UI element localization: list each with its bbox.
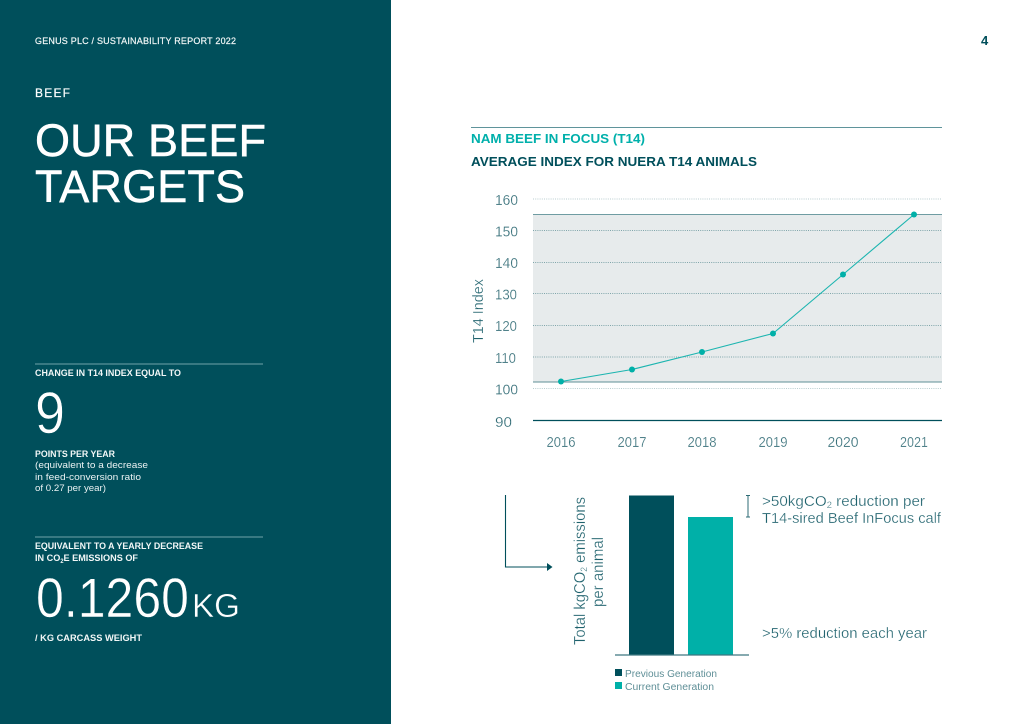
stat: T14 index change: (equivalent to a decrease bbox=[35, 460, 148, 471]
annotation: per calf reduction: T14-sired Beef InFocus calf bbox=[762, 511, 942, 527]
stat: T14 index change: CHANGE IN T14 INDEX EQUAL TO bbox=[35, 368, 181, 379]
y axis labels: 130 bbox=[495, 286, 517, 304]
reduction bracket bbox=[746, 496, 750, 517]
legend: Previous Generation bbox=[625, 669, 717, 680]
bar: previous generation bbox=[629, 496, 674, 656]
annotation: per calf reduction: 2 bbox=[827, 500, 832, 510]
line chart: T14 index bbox=[470, 192, 942, 451]
annotation: per calf reduction: reduction per bbox=[832, 494, 925, 510]
annotation: per calf reduction: >50kgCO bbox=[762, 494, 824, 510]
x axis labels: 2021 bbox=[900, 434, 928, 451]
y axis labels: 110 bbox=[495, 350, 516, 367]
stat: CO2e emissions decrease: 2 bbox=[60, 559, 64, 565]
stat: T14 index change: of 0.27 per year) bbox=[35, 483, 106, 494]
y axis labels: 90 bbox=[495, 414, 512, 431]
stat: T14 index change: in feed-conversion ratio bbox=[35, 472, 141, 483]
title: OUR BEEF bbox=[35, 115, 266, 166]
chart heading: AVERAGE INDEX FOR NUERA T14 ANIMALS bbox=[471, 155, 757, 169]
x axis labels: 2016 bbox=[546, 434, 576, 451]
stat: T14 index change bbox=[35, 364, 263, 494]
x axis labels: 2018 bbox=[688, 434, 716, 451]
report header: GENUS PLC / SUSTAINABILITY REPORT 2022 bbox=[35, 36, 236, 46]
legend: Current Generation bbox=[625, 682, 714, 693]
legend bbox=[615, 669, 717, 693]
stat: CO2e emissions decrease: / KG CARCASS WEIGHT bbox=[35, 633, 142, 644]
annotation: per calf reduction bbox=[762, 494, 942, 527]
target band bbox=[533, 214, 942, 382]
annotation: yearly reduction: >5% reduction each year bbox=[762, 626, 927, 642]
x axis labels: 2019 bbox=[758, 434, 788, 451]
title bbox=[35, 115, 266, 212]
arrow: line chart to bar chart bbox=[506, 495, 552, 571]
stat: CO2e emissions decrease: E EMISSIONS OF bbox=[64, 553, 138, 564]
panel: left summary bbox=[0, 0, 391, 724]
section label: BEEF bbox=[35, 86, 70, 100]
y axis title: 2 bbox=[579, 567, 589, 572]
page number: 4 bbox=[981, 33, 989, 48]
y axis labels: 100 bbox=[495, 382, 518, 398]
y axis title bbox=[572, 497, 607, 645]
chart heading bbox=[471, 128, 942, 169]
x axis labels: 2017 bbox=[618, 434, 646, 451]
y axis title: T14 Index bbox=[470, 279, 487, 343]
stat: T14 index change: POINTS PER YEAR bbox=[35, 449, 115, 460]
y axis labels: 160 bbox=[495, 192, 518, 209]
bar: current generation bbox=[688, 517, 733, 656]
y axis labels: 120 bbox=[495, 318, 517, 335]
data line bbox=[558, 212, 917, 384]
y axis labels: 150 bbox=[495, 224, 518, 240]
y axis labels: 140 bbox=[495, 255, 518, 272]
stat: CO2e emissions decrease: KG bbox=[192, 587, 240, 624]
stat: CO2e emissions decrease: EQUIVALENT TO A YEARLY DECREASE bbox=[35, 541, 203, 552]
y axis title: emissions bbox=[572, 497, 589, 567]
y axis title: per animal bbox=[590, 537, 607, 607]
chart heading: NAM BEEF IN FOCUS (T14) bbox=[471, 131, 645, 146]
y axis labels bbox=[495, 192, 518, 431]
y axis title: Total kgCO bbox=[572, 568, 589, 645]
stat: CO2e emissions decrease: IN CO bbox=[35, 553, 61, 564]
x axis labels bbox=[546, 434, 928, 451]
x axis labels: 2020 bbox=[828, 434, 858, 451]
stat: T14 index change: 9 bbox=[35, 381, 65, 446]
stat: CO2e emissions decrease bbox=[35, 537, 263, 644]
stat: CO2e emissions decrease: 0.1260 bbox=[36, 566, 189, 629]
bar chart: emissions per animal bbox=[572, 494, 942, 693]
title: TARGETS bbox=[35, 161, 245, 212]
